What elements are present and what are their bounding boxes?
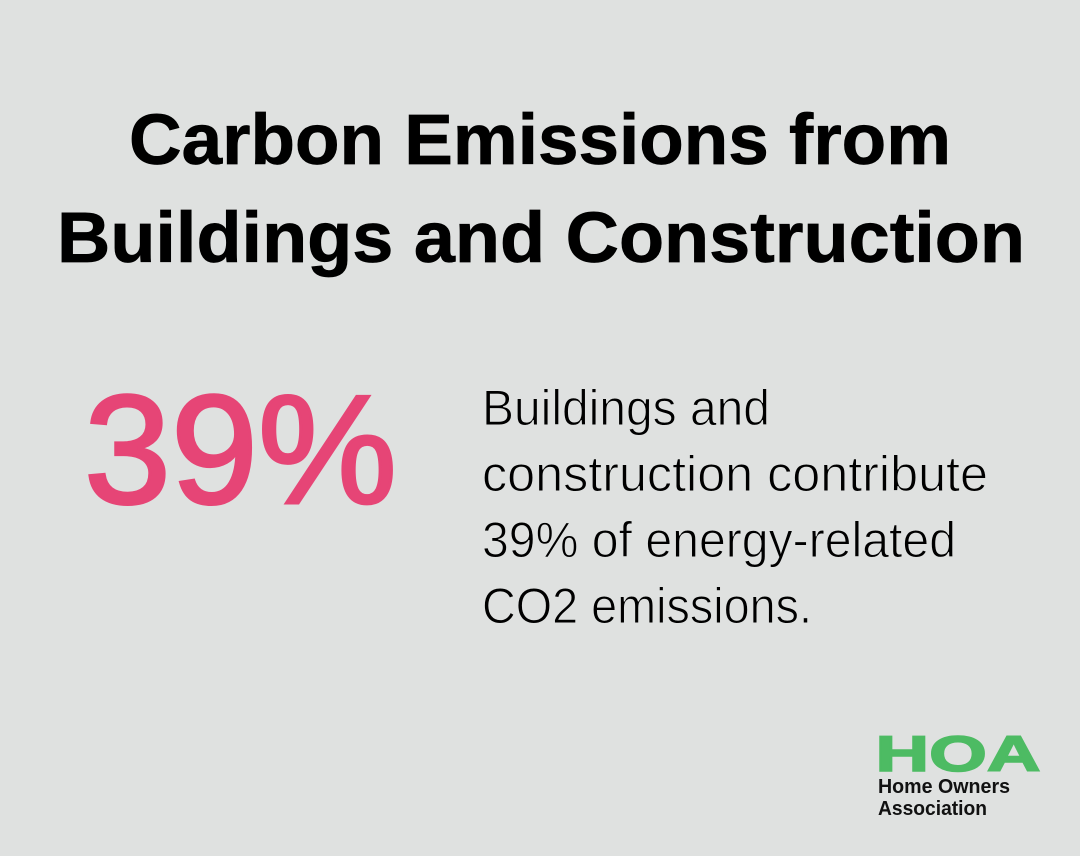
description text: Buildings and	[482, 380, 770, 436]
description text: construction contribute	[482, 446, 988, 502]
description text: 39% of energy-related	[482, 512, 956, 568]
big statistic: 39%: 39%	[84, 363, 397, 536]
logo: Home Owners Association	[876, 726, 1040, 820]
logo text: Association	[878, 798, 987, 820]
description text	[482, 380, 988, 634]
logo text: Home Owners	[878, 776, 1010, 798]
title	[57, 101, 1025, 278]
title: Carbon Emissions from	[129, 101, 951, 180]
logo text	[878, 776, 1010, 820]
title: Buildings and Construction	[57, 199, 1025, 278]
logo mark: HOA: HOA	[876, 726, 1040, 782]
description text: CO2 emissions.	[482, 578, 812, 634]
